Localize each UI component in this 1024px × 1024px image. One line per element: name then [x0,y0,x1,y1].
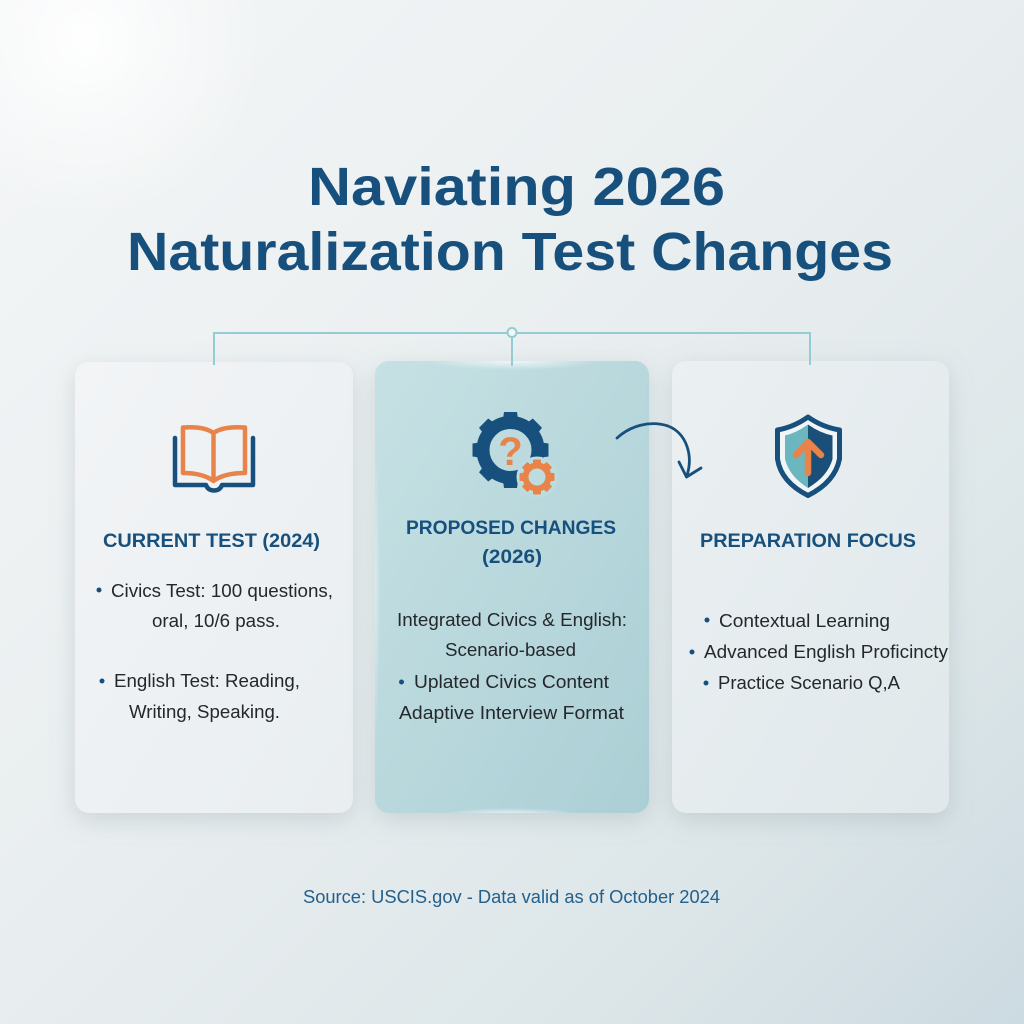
panel: proposed changes [370,352,649,820]
heading: proposed changes: (2026) [482,547,542,568]
heading: preparation focus: PREPARATION FOCUS [700,531,916,552]
icon: shield with up arrow [778,417,840,496]
text: current test bullets: Civics Test: 100 questions, [111,580,333,601]
text: preparation bullets [690,610,949,693]
title [127,157,893,282]
panel: preparation focus [672,361,949,813]
text: preparation bullets: Contextual Learning [719,610,890,631]
arrow: proposed to preparation [617,424,701,477]
text: proposed changes bullets: Adaptive Interview Format [399,702,624,723]
title: Naviating 2026 [308,157,725,217]
card highlights [375,361,582,813]
icon: gears with question mark: ? [498,430,523,474]
text: proposed changes bullets: Uplated Civics Content [414,671,609,692]
source note: Source: USCIS.gov - Data valid as of October 2024 [303,887,720,907]
connector: bracket linking cards [214,328,810,366]
text: proposed changes bullets: Integrated Civics & English: [397,609,627,630]
heading: proposed changes: PROPOSED CHANGES [406,518,616,539]
heading: proposed changes [406,518,616,568]
panel: current test [75,362,353,813]
text: proposed changes bullets [397,609,627,723]
heading: current test: CURRENT TEST (2024) [103,531,320,552]
text: proposed changes bullets: Scenario-based [445,639,576,660]
text: preparation bullets: Practice Scenario Q,A [718,672,901,693]
text: current test bullets [96,580,333,722]
title: Naturalization Test Changes [127,222,893,282]
text: current test bullets: Writing, Speaking. [129,701,280,722]
text: current test bullets: English Test: Reading, [114,670,300,691]
text: preparation bullets: Advanced English Proficincty [704,641,949,662]
text: current test bullets: oral, 10/6 pass. [152,610,280,631]
icon: open book [175,427,253,490]
icon: gears with question mark [472,412,558,498]
